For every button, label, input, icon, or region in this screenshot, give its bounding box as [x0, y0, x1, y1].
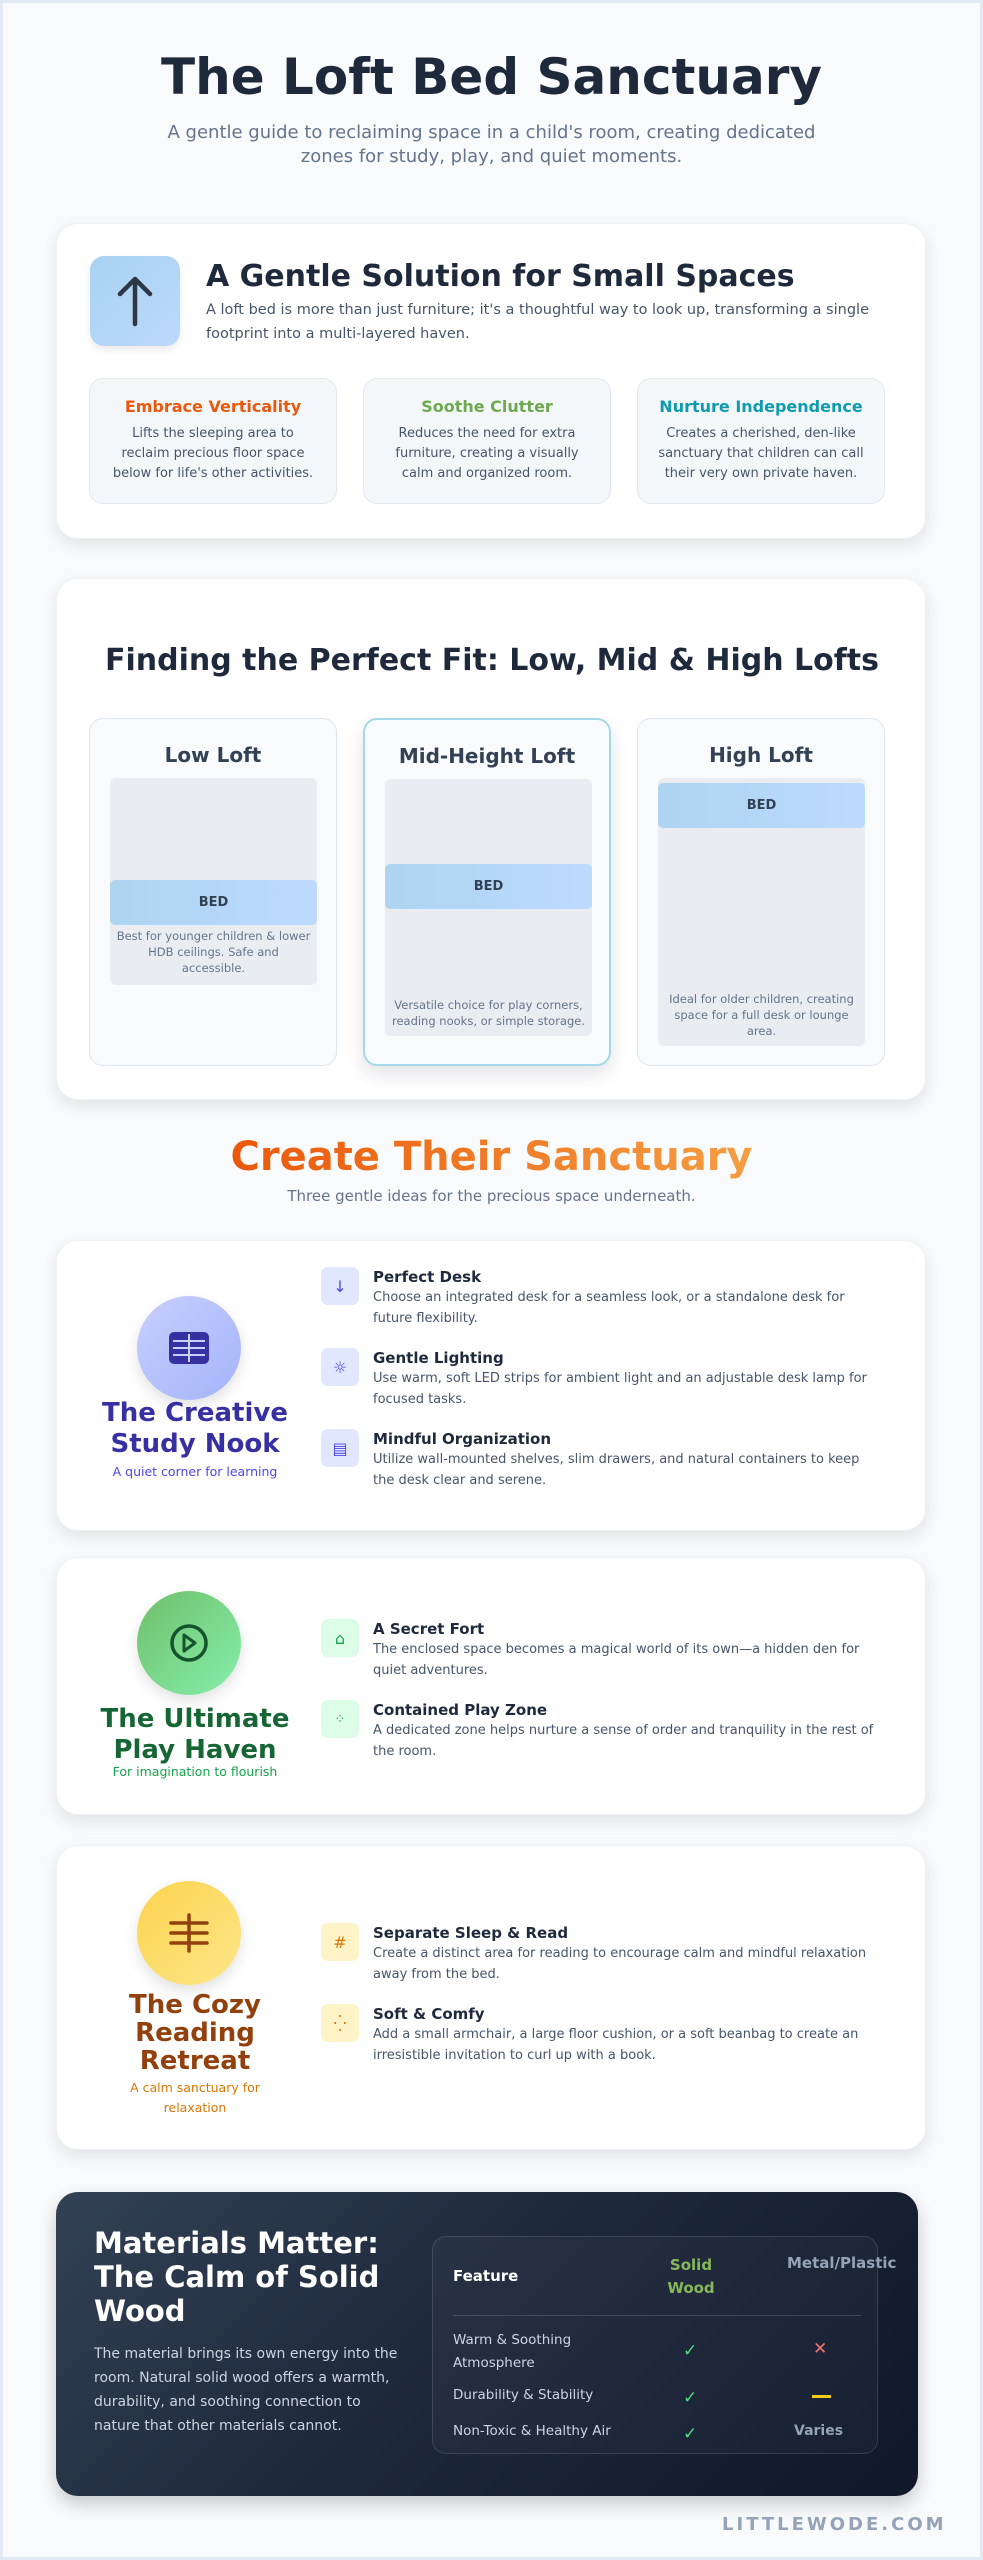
- item: lighting: [321, 1348, 867, 1407]
- loft: low: [89, 718, 337, 1066]
- loft: low: Low Loft: [165, 743, 261, 767]
- comparison table: Varies: [794, 2423, 843, 2439]
- subheading: Three gentle ideas for the precious space underneath.: [287, 1187, 696, 1205]
- paragraph: The material brings its own energy into the room. Natural solid wood offers a warmth, durability, and soothing connection to nature that other materials cannot.: [94, 2346, 397, 2434]
- title: [129, 1990, 261, 2076]
- comparison table: ✓: [683, 2424, 697, 2444]
- item: sleep read: Separate Sleep & Read: [373, 1924, 568, 1942]
- icon: play: [137, 1591, 241, 1695]
- item: play zone: [321, 1700, 874, 1759]
- item: play zone: A dedicated zone helps nurture a sense of order and tranquility in the rest of the room.: [373, 1723, 873, 1759]
- heading: A Gentle Solution for Small Spaces: [206, 259, 795, 294]
- item: lighting: Use warm, soft LED strips for ambient light and an adjustable desk lamp for focused tasks.: [373, 1371, 867, 1407]
- subtitle: A gentle guide to reclaiming space in a child's room, creating dedicated: [168, 122, 815, 143]
- comparison table: Solid: [670, 2256, 712, 2274]
- title: Reading: [135, 2018, 255, 2048]
- title: The Loft Bed Sanctuary: [161, 48, 822, 106]
- item: play zone: Contained Play Zone: [373, 1701, 547, 1719]
- comparison table: ✓: [683, 2388, 697, 2408]
- subcard: independence: Nurture Independence: [659, 397, 863, 416]
- title: [102, 1398, 288, 1459]
- comparison table: ✓: [683, 2341, 697, 2361]
- footer brand: LITTLEWODE.COM: [722, 2514, 947, 2535]
- item: organization: [321, 1429, 859, 1488]
- item: fort: [321, 1619, 860, 1678]
- item: fort: The enclosed space becomes a magical world of its own—a hidden den for quiet adventures.: [373, 1642, 859, 1678]
- item: lighting: Gentle Lighting: [373, 1349, 504, 1367]
- tagline: A quiet corner for learning: [113, 1464, 277, 1479]
- comparison table: Wood: [667, 2279, 715, 2297]
- tagline: A calm sanctuary for relaxation: [130, 2080, 260, 2115]
- icon: up arrow: [90, 256, 180, 346]
- panel: perfect fit: [56, 578, 926, 1100]
- item: desk: ↓: [333, 1276, 347, 1296]
- subtitle: [168, 122, 815, 167]
- item: organization: Utilize wall-mounted shelves, slim drawers, and natural containers to keep the desk clear and serene.: [373, 1452, 859, 1488]
- intro text: A loft bed is more than just furniture; it's a thoughtful way to look up, transforming a single footprint into a multi-layered haven.: [206, 302, 869, 342]
- loft: high: Ideal for older children, creating space for a full desk or lounge area.: [669, 992, 854, 1038]
- title: The Cozy: [129, 1990, 261, 2020]
- item: lighting: ☼: [333, 1358, 347, 1376]
- loft: low: Best for younger children & lower HDB ceilings. Safe and accessible.: [117, 929, 310, 975]
- icon: reading: [137, 1881, 241, 1985]
- title: The Ultimate: [100, 1704, 290, 1734]
- comparison table: ✕: [813, 2339, 827, 2359]
- loft: mid: BED: [474, 879, 503, 894]
- loft: mid: Mid-Height Loft: [399, 744, 575, 768]
- title: Play Haven: [113, 1735, 277, 1765]
- subcard: verticality: Embrace Verticality: [125, 397, 301, 416]
- comparison table: Warm & Soothing: [453, 2332, 571, 2348]
- item: desk: Perfect Desk: [373, 1268, 481, 1286]
- loft: low: BED: [199, 895, 228, 910]
- item: organization: Mindful Organization: [373, 1430, 551, 1448]
- comparison table: Atmosphere: [453, 2355, 535, 2371]
- heading: Finding the Perfect Fit: Low, Mid & High Lofts: [105, 643, 879, 678]
- item: desk: Choose an integrated desk for a seamless look, or a standalone desk for future flexibility.: [373, 1290, 845, 1326]
- item: sleep read: Create a distinct area for reading to encourage calm and mindful relaxation away from the bed.: [373, 1946, 866, 1982]
- loft: high: [637, 718, 885, 1066]
- panel: gentle solution: [56, 223, 926, 539]
- comparison table: Durability & Stability: [453, 2387, 593, 2403]
- loft: mid: [363, 718, 611, 1066]
- panel: study nook: [56, 1240, 926, 1531]
- loft: high: BED: [747, 798, 776, 813]
- title: Retreat: [140, 2046, 250, 2076]
- title: [100, 1704, 290, 1765]
- subcard: independence: Creates a cherished, den-like sanctuary that children can call their very own private haven.: [658, 426, 864, 481]
- item: sleep read: #: [333, 1932, 347, 1952]
- comparison table: Feature: [453, 2267, 518, 2285]
- item: desk: [321, 1267, 845, 1326]
- heading: create sanctuary: Create Their Sanctuary: [230, 1134, 752, 1180]
- loft: mid: Versatile choice for play corners, reading nooks, or simple storage.: [392, 998, 585, 1028]
- item: soft comfy: [321, 2004, 858, 2063]
- subcard: clutter: Reduces the need for extra furniture, creating a visually calm and organized room.: [395, 426, 579, 481]
- item: organization: ▤: [332, 1438, 348, 1458]
- subtitle: zones for study, play, and quiet moments.: [301, 146, 682, 167]
- item: sleep read: [321, 1923, 866, 1982]
- item: fort: ⌂: [335, 1628, 345, 1648]
- subcard: clutter: Soothe Clutter: [421, 397, 553, 416]
- icon: book: [137, 1296, 241, 1400]
- item: fort: A Secret Fort: [373, 1620, 484, 1638]
- title: Study Nook: [110, 1429, 280, 1459]
- item: soft comfy: ⁛: [334, 2014, 346, 2032]
- subcard: verticality: [89, 378, 337, 504]
- tagline: For imagination to flourish: [113, 1764, 277, 1779]
- title: The Creative: [102, 1398, 288, 1428]
- subcard: independence: [637, 378, 885, 504]
- comparison table: Non-Toxic & Healthy Air: [453, 2423, 611, 2439]
- panel: play haven: [56, 1557, 926, 1815]
- item: play zone: ⁘: [335, 1712, 345, 1726]
- heading: Materials Matter: The Calm of Solid Wood: [94, 2226, 379, 2328]
- comparison table: Metal/Plastic: [787, 2254, 896, 2272]
- item: soft comfy: Soft & Comfy: [373, 2005, 485, 2023]
- comparison table: [432, 2236, 878, 2454]
- loft: high: High Loft: [709, 743, 813, 767]
- subcard: verticality: Lifts the sleeping area to reclaim precious floor space below for life's other activities.: [113, 426, 313, 481]
- item: soft comfy: Add a small armchair, a large floor cushion, or a soft beanbag to create an irresistible invitation to curl up with a book.: [373, 2027, 858, 2063]
- panel: reading retreat: [56, 1845, 926, 2150]
- panel: materials: [56, 2192, 918, 2496]
- subcard: clutter: [363, 378, 611, 504]
